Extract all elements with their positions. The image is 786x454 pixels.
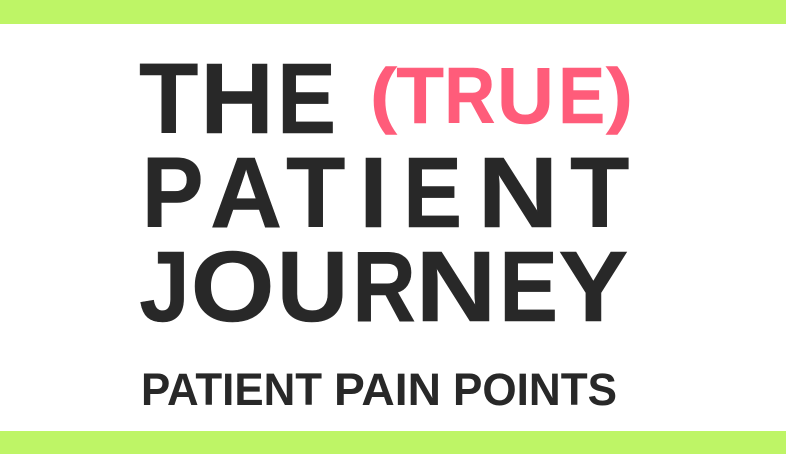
- title word: PATIENT: N: [478, 137, 559, 249]
- title word: THE: H: [200, 44, 274, 155]
- subtitle: [141, 364, 617, 415]
- title word: JOURNEY: [139, 230, 628, 343]
- bottom green band: [0, 431, 786, 454]
- subtitle: POINTS: [453, 364, 617, 415]
- title word: (TRUE): ): [606, 54, 633, 136]
- subtitle: PATIENT: [141, 364, 322, 415]
- title word: PATIENT: I: [359, 137, 388, 249]
- title word: JOURNEY: N: [416, 231, 497, 343]
- title word: PATIENT: T: [570, 137, 629, 248]
- title word: (TRUE): T: [396, 51, 444, 140]
- title word: PATIENT: P: [142, 138, 204, 249]
- title word: PATIENT: T: [286, 137, 345, 248]
- title word: JOURNEY: J: [139, 231, 190, 343]
- title word: THE: T: [139, 43, 198, 154]
- title word: (TRUE): (: [370, 54, 397, 136]
- title word: PATIENT: E: [403, 137, 462, 248]
- title word: (TRUE): E: [558, 51, 605, 140]
- top green band: [0, 0, 786, 24]
- title word: (TRUE): U: [497, 50, 554, 140]
- title word: JOURNEY: O: [191, 232, 275, 343]
- title word: (TRUE): [370, 50, 633, 140]
- subtitle: PAIN: [334, 364, 441, 415]
- title: [139, 43, 633, 343]
- title word: THE: [139, 43, 336, 155]
- title word: JOURNEY: E: [499, 231, 558, 342]
- title word: PATIENT: A: [210, 137, 282, 249]
- title word: (TRUE): R: [444, 51, 495, 140]
- title word: JOURNEY: Y: [558, 230, 628, 342]
- title word: PATIENT: [142, 137, 629, 249]
- title word: JOURNEY: U: [277, 232, 348, 343]
- title word: JOURNEY: R: [352, 231, 416, 342]
- title word: THE: E: [277, 43, 336, 154]
